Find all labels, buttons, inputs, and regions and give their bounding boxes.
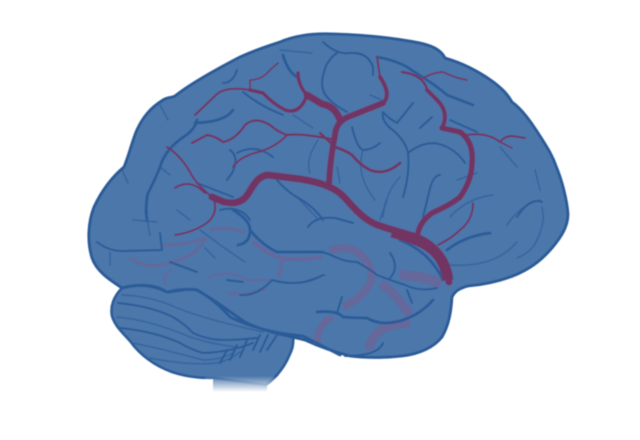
- brainstem fade: [205, 376, 275, 392]
- sulci: temporal and occipital folds: [97, 200, 543, 356]
- artery: main middle cerebral trunk: [212, 175, 449, 282]
- brain illustration: [89, 34, 568, 392]
- cerebellum: [111, 265, 293, 385]
- cerebrum: [89, 34, 568, 357]
- artery: branches of the frontal lobe: [167, 57, 400, 235]
- artery: branches of the parietal lobe: [402, 72, 525, 245]
- artery: widened lower trunk: [392, 232, 448, 280]
- brainstem: [213, 330, 294, 392]
- faded deep arteries: [130, 229, 441, 350]
- cerebellum folds: [117, 295, 277, 364]
- sulci: frontal and parietal folds: [122, 42, 542, 220]
